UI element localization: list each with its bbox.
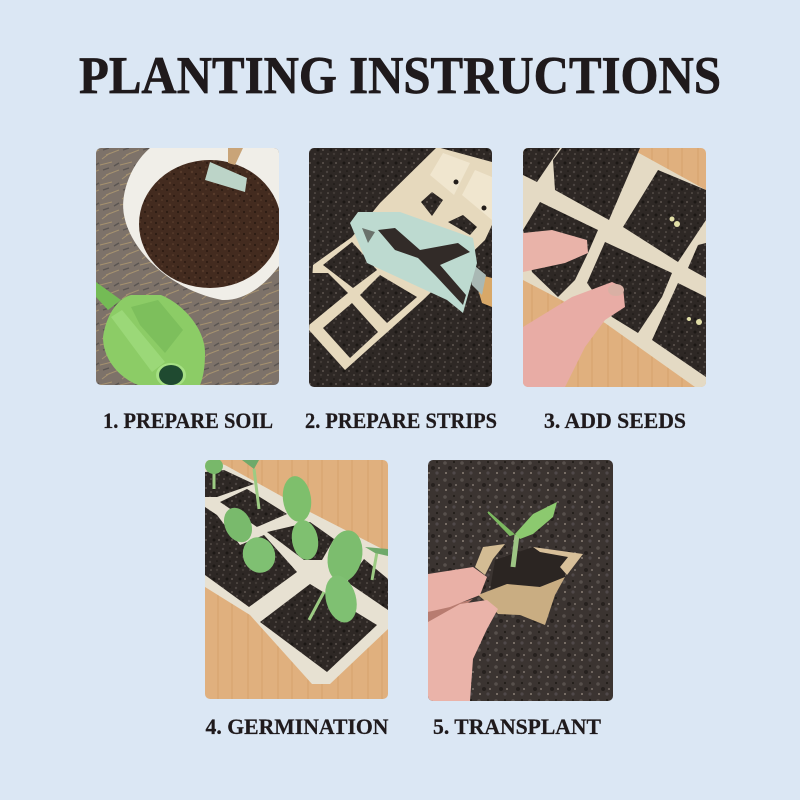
- label: step 3: 3. ADD SEEDS: [544, 408, 686, 433]
- icon: small trowel in soil: [205, 148, 247, 192]
- title: PLANTING INSTRUCTIONS: [79, 47, 721, 105]
- label: step 4: 4. GERMINATION: [206, 714, 389, 739]
- photo: prepare strips: [309, 147, 492, 387]
- photo: add seeds: [523, 147, 706, 387]
- bucket of soil: [123, 148, 281, 300]
- label: step 2: 2. PREPARE STRIPS: [305, 408, 497, 433]
- photo: transplant: [428, 460, 613, 701]
- icon: trowel: [350, 212, 492, 313]
- label: step 5: 5. TRANSPLANT: [433, 714, 601, 739]
- peat pot: [475, 544, 583, 625]
- seedling: [488, 502, 557, 567]
- tray with soil cells: [205, 459, 388, 684]
- label: step 1: 1. PREPARE SOIL: [103, 408, 273, 433]
- seed tray with soil cells: [523, 147, 706, 387]
- seed strip tray: [309, 147, 492, 370]
- icon: green watering can: [96, 282, 205, 387]
- photo: germination: [205, 458, 388, 699]
- seedlings: [205, 458, 388, 626]
- hand holding pot: [428, 567, 498, 701]
- photo: prepare soil: [96, 148, 281, 387]
- hand holding seeds: [523, 230, 625, 387]
